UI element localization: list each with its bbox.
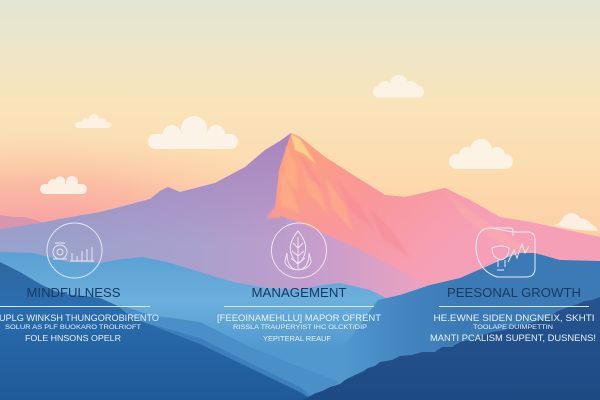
divider	[0, 306, 150, 307]
cloud: right	[449, 139, 513, 169]
icon: personal growth	[476, 228, 535, 277]
panel: mindfulness	[0, 223, 159, 343]
main mountain	[0, 133, 600, 310]
cloud: large centre left	[148, 116, 238, 149]
panel: management	[217, 223, 381, 343]
ridge: front right forest	[302, 297, 600, 400]
icon: management leaf	[272, 223, 326, 278]
body text: management: YEPITERAL REAUF	[263, 336, 331, 343]
distant left ridge	[0, 215, 55, 260]
body text: personal growth: MANTI PCALISM SUPENT, DUSNENS!	[430, 333, 596, 343]
body text: management: RISSLA TRAUPERYIST IHC OLCKT/DIP	[233, 324, 367, 331]
heading: mindfulness: MINDFULNESS	[26, 285, 121, 300]
heading: personal growth: PEESONAL GROWTH	[447, 285, 581, 300]
divider	[224, 306, 374, 307]
ridge: pale blue far	[0, 252, 410, 400]
body text: mindfulness: SOLUR AS PLF BUOKARO TROLRIOFT	[5, 324, 141, 331]
mountain: orange streaks	[266, 145, 560, 262]
mountain: summit highlight	[291, 134, 316, 164]
ridge: dark left forest	[0, 262, 312, 400]
body text: mindfulness: UPLG WINKSH THUNGOROBIRENTO	[0, 313, 159, 324]
mountain: sunlit right face	[274, 133, 600, 310]
cloud: small left	[75, 114, 111, 128]
body text: management	[217, 313, 381, 343]
mountain: shaded face base	[0, 133, 600, 310]
panel: personal growth	[430, 228, 596, 343]
body text: personal growth: HE.EWNE SIDEN DNGNEIX, SKHTI	[434, 313, 594, 324]
cloud: top right	[373, 75, 424, 98]
icon: mindfulness circle	[47, 223, 102, 278]
ridge: lower centre layer	[80, 318, 315, 400]
divider	[439, 306, 589, 307]
body text: management: [FEEOINAMEHLLU] MAPOR OFRENT	[217, 313, 381, 324]
mountain: upper purple tint	[0, 133, 291, 250]
cloud: far right	[553, 213, 598, 231]
heading: management: MANAGEMENT	[252, 285, 347, 300]
cloud: low left	[40, 176, 87, 194]
body text: personal growth	[430, 313, 596, 343]
ridge: mid right	[300, 253, 600, 400]
body text: personal growth: TOOLAPE DUIMPETTIN	[473, 324, 553, 331]
body text: mindfulness: FOLE HNSONS OPELR	[25, 334, 121, 343]
ridge: centre valley	[100, 305, 340, 400]
body text: mindfulness	[0, 313, 159, 343]
